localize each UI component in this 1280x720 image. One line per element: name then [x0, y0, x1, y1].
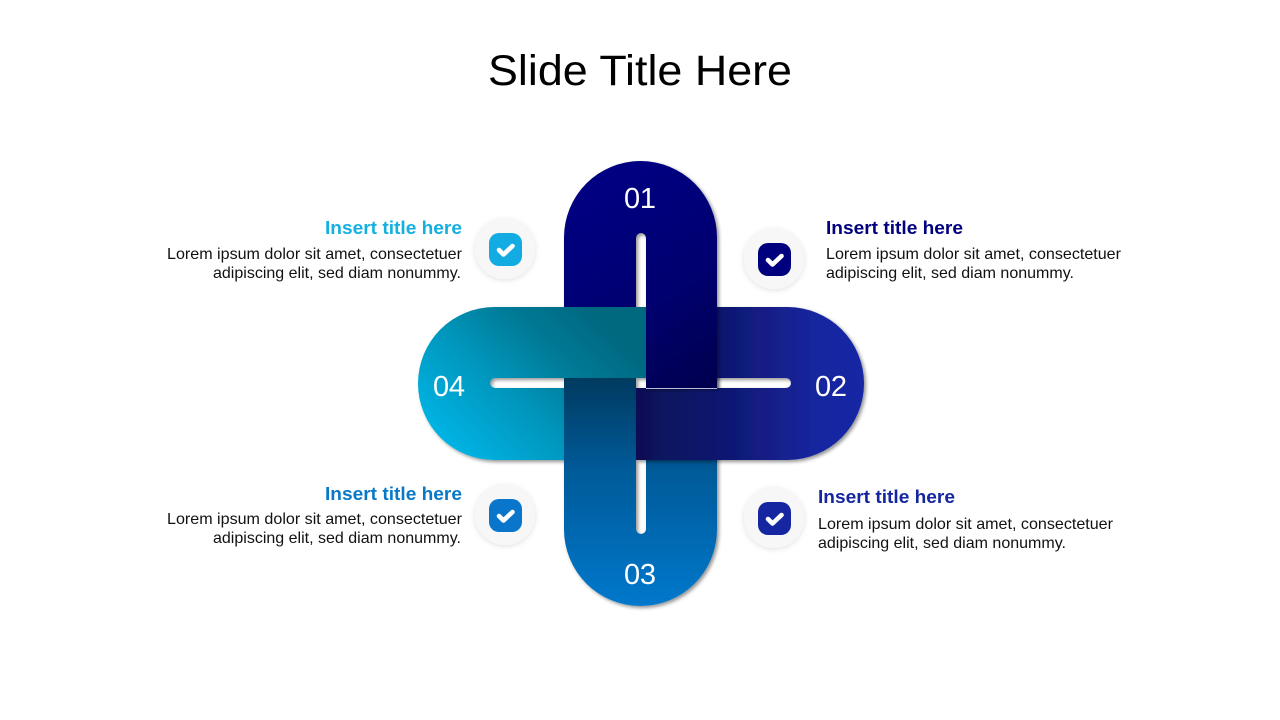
heading: Insert title here	[325, 484, 462, 504]
icon: check badge	[475, 485, 535, 545]
heading: Insert title here	[818, 487, 955, 507]
diagram: interlocking loops	[418, 161, 864, 606]
text block: adipiscing elit, sed diam nonummy.	[818, 535, 1066, 552]
callout: bottom right	[744, 487, 1113, 552]
text block: Lorem ipsum dolor sit amet, consectetuer	[818, 516, 1113, 533]
heading: Insert title here	[826, 218, 963, 238]
loop 02 right band	[636, 307, 864, 460]
icon: check badge	[744, 229, 804, 289]
text block: Lorem ipsum dolor sit amet, consectetuer	[826, 246, 1121, 263]
text block: adipiscing elit, sed diam nonummy.	[213, 530, 461, 547]
title: Slide Title Here	[488, 47, 792, 95]
callout: bottom left	[167, 484, 535, 547]
text block: adipiscing elit, sed diam nonummy.	[213, 265, 461, 282]
text block	[167, 511, 462, 547]
text block: adipiscing elit, sed diam nonummy.	[826, 265, 1074, 282]
icon: check badge	[744, 488, 804, 548]
text block	[167, 246, 462, 282]
text block	[818, 516, 1113, 552]
number 04: 04	[433, 371, 465, 403]
callout: top left	[167, 218, 535, 282]
callout: top right	[744, 218, 1121, 289]
number 02: 02	[815, 371, 847, 403]
loop 01 top band	[564, 161, 717, 388]
loop 04 left band	[418, 307, 646, 460]
loop 01 strand over right band	[646, 307, 722, 392]
number 01: 01	[624, 183, 656, 215]
number 03: 03	[624, 559, 656, 591]
text block: Lorem ipsum dolor sit amet, consectetuer	[167, 246, 462, 263]
text block: Lorem ipsum dolor sit amet, consectetuer	[167, 511, 462, 528]
heading: Insert title here	[325, 218, 462, 238]
text block	[826, 246, 1121, 282]
loop 03 bottom band	[564, 378, 717, 606]
icon: check badge	[475, 219, 535, 279]
